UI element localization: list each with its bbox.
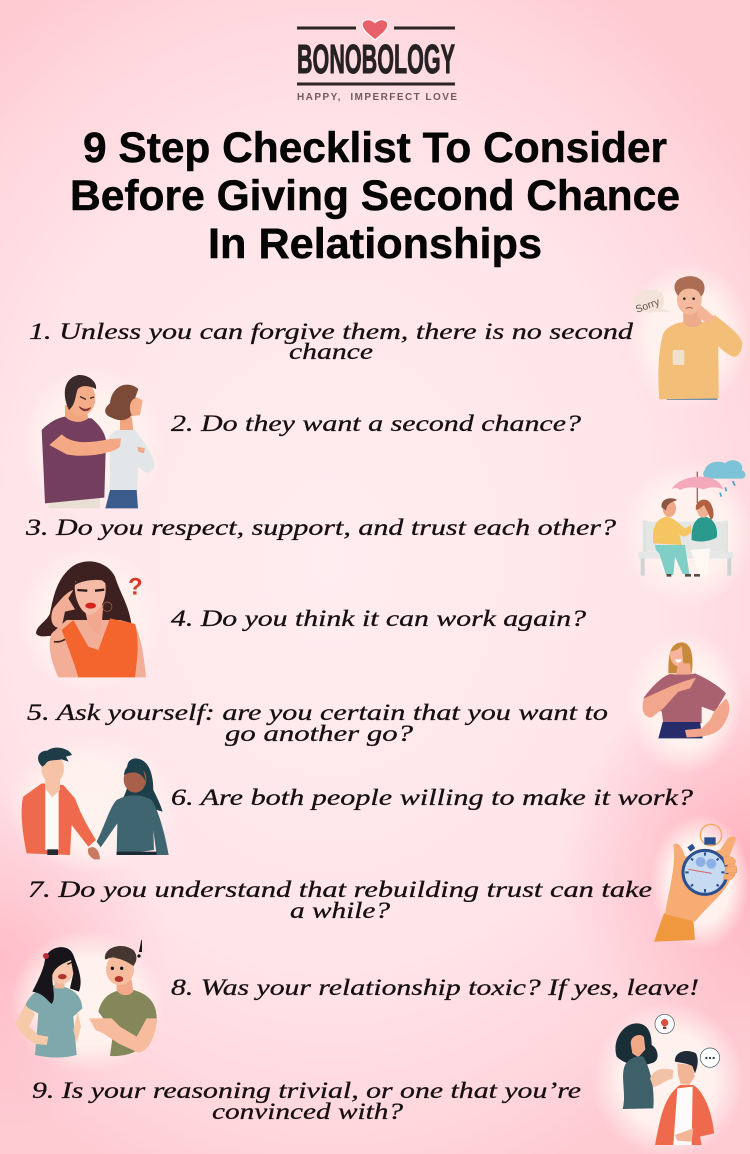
step 1 text: chance xyxy=(289,339,373,365)
icon: heart xyxy=(362,20,388,40)
illustration: couple, man reaching out xyxy=(42,375,155,508)
illustration: hand holding stopwatch xyxy=(654,824,737,942)
illustration: couple on bench under umbrella xyxy=(638,460,745,577)
step 9 text: convinced with? xyxy=(212,1099,403,1125)
illustration: man saying sorry: Sorry xyxy=(634,297,662,316)
step 7 text: 7. Do you understand that rebuilding trust can take xyxy=(28,877,652,903)
step 7 text xyxy=(28,877,652,924)
logo: Bonobology xyxy=(297,20,457,103)
step 4 text: 4. Do you think it can work again? xyxy=(171,606,586,632)
illustration: couple holding hands xyxy=(22,748,169,859)
illustration: woman with idea and man talking xyxy=(615,1014,720,1145)
step 7 text: a while? xyxy=(290,898,390,924)
logo: Bonobology: BONOBOLOGY xyxy=(297,36,455,82)
logo: Bonobology: HAPPY, IMPERFECT LOVE xyxy=(297,92,457,103)
title: Before Giving Second Chance xyxy=(70,173,680,220)
illustration: woman pointing at herself xyxy=(643,642,729,738)
step 9 text xyxy=(32,1078,581,1125)
illustration: arguing couple xyxy=(16,940,157,1057)
title: In Relationships xyxy=(208,221,542,268)
illustration: man saying sorry xyxy=(633,276,742,400)
title: 9 Step Checklist To Consider xyxy=(83,125,667,172)
step 3 text: 3. Do you respect, support, and trust each other? xyxy=(25,515,616,541)
illustration: thinking woman with question mark xyxy=(36,561,146,677)
step 5 text: go another go? xyxy=(225,721,413,747)
step 1 text xyxy=(29,319,633,365)
step 2 text: 2. Do they want a second chance? xyxy=(171,411,581,437)
step 9 text: 9. Is your reasoning trivial, or one that you’re xyxy=(32,1078,581,1104)
step 1 text: 1. Unless you can forgive them, there is no second xyxy=(29,319,633,345)
step 8 text: 8. Was your relationship toxic? If yes, leave! xyxy=(171,975,699,1001)
title xyxy=(70,125,680,268)
illustration glows xyxy=(6,262,750,1154)
step 6 text: 6. Are both people willing to make it work? xyxy=(171,785,693,811)
step 5 text xyxy=(27,700,608,747)
illustration: thinking woman with question mark: ? xyxy=(128,574,143,601)
step 5 text: 5. Ask yourself: are you certain that you want to xyxy=(27,700,608,726)
